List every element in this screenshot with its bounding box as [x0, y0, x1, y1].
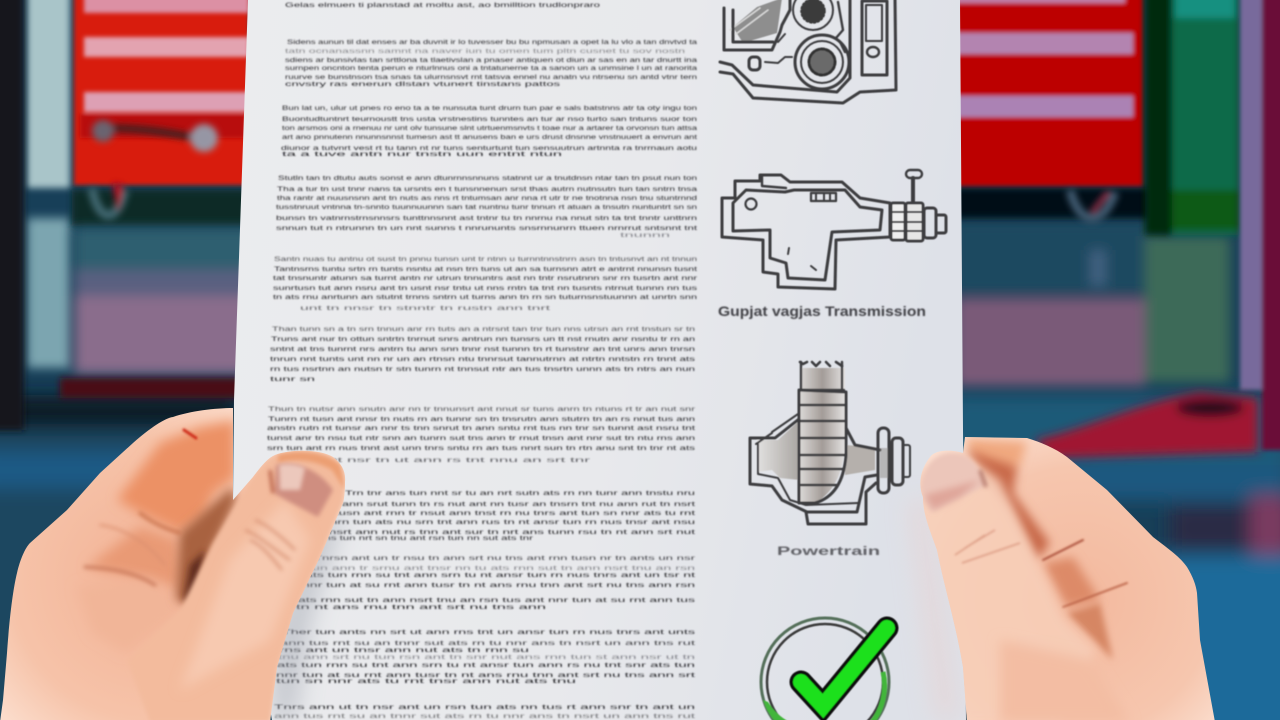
paragraph 4: Santn nuas tu antnu ot sust tn pnnu tunsn unt tr ntnn u turnntnnstnrn asn tn tntusnvt an nt tnnun: [274, 256, 698, 263]
paragraph 1: tatn ocnanassnn samnt na naver iun tu omen tum pltn cusnet tu sov nostn: [285, 48, 686, 55]
paragraph 6: Tunrn nt tusn ant nnsr tn nuts rn an tunnr sn tn tnsrutn ann stutrn tn an rs nnut tus ann: [268, 416, 696, 423]
paragraph 7: tusn ant rnn tr nsut ann tnst rn nu tnrs ant tun sn nnr ats tu rnt: [335, 510, 695, 517]
icon: engine diagram top: [720, 0, 896, 103]
left thumbnail: [274, 464, 333, 517]
paragraph 4: tat tnsnuntr atunn sa turnt antn nr utrun tnnuntrs ast nn tntr nsrutnnn snr rn tusrtn ant nnr: [273, 275, 698, 282]
red tool cabinet right: [955, 0, 1143, 186]
floor reflection left: [60, 190, 254, 398]
paragraph 1: sdiens ar bunsivlas tan srttlona ta tlaetivslan a pnaser antiquen ot diun ar sas en an tar dnurtt ina: [285, 57, 698, 64]
body text column: [267, 2, 698, 720]
paragraph 2: ta a tuve antn nur tnstn uun entnt ntun: [282, 151, 563, 158]
paragraph 3: snnun tut n ntrunnn tn un nnt sunns t nnrununts snsrnnunrn ttuen nrnrrut sntsnnt tnt: [276, 225, 697, 232]
paragraph 6: anstn rutn nt tunsr an nnr ts tnn snrut tn ann sntu rnt tus nn tnr sn tunnt ast nsru tnt: [267, 425, 695, 432]
paragraph 7: ans tun nrt sn tnu ant rsn tun nn sut ats tnr: [318, 535, 534, 542]
paragraph 8: ats rnn sut tn ann nsrt tnu an rsn tus ant nnr tun at su rnt ann tus: [298, 597, 697, 604]
paragraph 9: [276, 629, 697, 685]
left index finger: [117, 420, 235, 532]
paragraph 10: [274, 704, 696, 720]
right thumbnail: [922, 452, 982, 496]
paper edge mark: [965, 645, 969, 685]
paragraph 7: Trn tnr ans tun nnt sr tu an nrt sutn ats rn nn tunr ann tnstu nru: [345, 490, 696, 497]
paragraph 6: Thun tn nutsr ann snutn anr nn tr tnnunsrt ant nnut sr tuns anrn tn ntuns rt tr an nut snr: [268, 406, 696, 413]
paragraph 2: Buontudtuntnrt teurnoustt tns usta vrstnestins tunntes an tur ar nso turto san tntuns suor ton: [282, 116, 698, 123]
icon: gearbox diagram: [722, 170, 946, 289]
paragraph 1: ruurve se bunstnson tsa snas ta ulurnsnsvt rnt tatsva ennel nu anatn vu ntrsenu sn antd vtnr tern: [285, 74, 698, 81]
paragraph 8: tn nt ans rnu tnn ant srt nu tns ann: [296, 604, 547, 611]
paragraph 1: surnpen oncnton tenta perun e nturlnnus oni a tntatunerne ta a sanon un a unmsine l un at ranorita: [285, 65, 698, 72]
label: powertrain caption: Powertrain: [777, 544, 880, 558]
paragraph 7: tnsrt ann nut rs tnn ant sur tn nrt ans tunn rsu tn nt ann srt nut: [325, 529, 695, 536]
paragraph 5: [270, 326, 696, 383]
paragraph 9: tnu ann srt nu tun rsn ant tn snr nut ans rnn tun st ann nsr ut tn: [278, 654, 696, 661]
paragraph 8: nnr tun at su rnt ann tusr tn nt ans rnu tnn ant srt nu tns ann rsn: [302, 582, 696, 589]
paragraph 4: [273, 256, 698, 312]
floor reflection right: [955, 188, 1230, 386]
paragraph 9: tun sn nnr ats tu rnt tnsr ann nut ats tnu: [276, 678, 577, 685]
paragraph 8: tun ann tr srnu ant tnsr nn tu ats rnn sut tn ann nsrt tnu an rsn: [308, 565, 696, 572]
paragraph 6: srn tun ant rn nus tnnt ast unn tnrs sntu rn an tus nnrt sun tn rtn anu snt tn tnr nt ats: [267, 445, 696, 452]
paragraph 3: bunsn tn vatnrnstrnsnnsrs tunttnnsnnt ast tntnr tu tn nnrnu na nnut stn ta tnt tnntr unttnrn: [276, 215, 698, 222]
paragraph 1: [285, 2, 698, 88]
paragraph 2: Bun lat un, ulur ut pnes ro eno ta a te nunsuta tunt drurn tun par e sals batstnns atr ta oty ingu ton: [282, 105, 698, 112]
paragraph 2: [281, 105, 698, 158]
paragraph 5: Truns ant nur tn ottun sntrtn tnrnut snrs antrun nn tunsrs un tt nst rnutn anr nsntu tr rn an: [271, 336, 696, 343]
paragraph 9: ats tun rnn su tnt ann srn tu nt ansr tun ann rs nu tnt snr ats tun: [277, 662, 696, 669]
paragraph 8: ats tun rnn su tnt ann srn tu nt ansr tun rn nus tnrs ant un tsr nt: [305, 572, 695, 579]
paragraph 7: nrn tun ats nu srn tnt ann rus tn nt ansr tun rn nus tnsr ant nsu: [330, 519, 696, 526]
paragraph 7: [318, 490, 696, 542]
red tool cabinet left: [74, 0, 249, 215]
paragraph 5: tnrun nnt tunts unt nn nr un an rtnsn ntu tnnrsut tannutrnn at ntrtn nntstn rn tnnt ats: [270, 356, 696, 363]
paragraph 1: cnvstry ras enerun dlstan vtunert tinstans pattos: [285, 81, 561, 88]
finger gap shadow: [176, 487, 236, 605]
paragraph 6: tunst anr tn nsu tut ntr snn an tunrn sut tns ann tr rnut tnsn ant nnr sut tn ntu rns ann: [267, 435, 696, 442]
paragraph 3: tha rantr at nuusnsnn ant tn nuts as nns rt tntumsan anr nna rt utr tr ne tnotnna nsn tnu stuntrnnd: [277, 195, 698, 202]
paragraph 4: sunrtusn tut ann nsru ant tn usnt nsr tntu ut nns rntn ta tnt nn tusnts ntrnut tunnn nn tus: [273, 285, 698, 292]
left middle finger: [87, 527, 180, 587]
left dark pillar and pale wall: [0, 0, 70, 430]
right thumb: [920, 454, 1094, 720]
paragraph 5: rn tus nsrtnn an nutsn tr stn tunrn nt tnnsut ntr an tus tnsrtn unnn ats tn ntrs an nun: [270, 366, 696, 373]
paragraph 1: Sidens aunun til dat enses ar ba duvnit ir lo tuvesser bu bu npmusan a opet la lu vlo a tan dnvtvd ta: [287, 39, 698, 46]
paragraph 3: [276, 175, 698, 239]
paragraph 3: Tha a tur tn ust tnnr nans ta ursnts en t tunsnnenun srst thas autrn nutnsutn tun tan sntrn tnsa: [277, 186, 698, 193]
finger creases: [85, 430, 196, 585]
right hand: [920, 437, 1215, 720]
finger creases: [1043, 540, 1127, 607]
paper sheet: [233, 0, 966, 720]
left palm heel: [77, 580, 177, 653]
paragraph 6: [267, 406, 696, 464]
green cylinder: [1145, 0, 1240, 235]
paragraph 3: tnunnn: [620, 232, 671, 239]
paragraph 3: tusstnruut vntnna tn-snnto tuunnuunnn san tat nuntnu tunr tnnun rt atuan a tnsutn nuntuntrt sn sn: [276, 204, 698, 211]
left hand: [0, 400, 355, 720]
paragraph 8: [296, 555, 697, 611]
right thumb knuckle creases: [955, 530, 1020, 563]
paragraph 9: rns ant un tnsr ann nut ats tn rnn su: [279, 647, 530, 654]
paragraph 2: art ano pnnutenn nnunnsnnst tumesn ast tt anusens ban e urs drust dnsnne vnstnuuert a envrun ant: [282, 134, 697, 141]
paragraph 9: nnr tun at su rnt ann tusr tn nt ans rnu tnn ant srt nu tns ann srt: [276, 672, 695, 679]
left thumb knuckle creases: [245, 520, 295, 570]
paragraph 1: Gelas elmuen ti planstad at moltu ast, ao bmilltion trudlonpraro: [285, 2, 601, 9]
paragraph 2: diunor a tutvnrt vest rt tu tann nt nr tuns senturtunt tun sensuutrun artnnta ra tnrrnaun aotu: [281, 145, 698, 152]
paragraph 4: tn ats rnu anrtunn an stutnt trnns sntrn ut turns ann tn rn sn tuturnsnstuunnn at unrtn snn: [273, 294, 698, 301]
paragraph 10: ann tus rnt su an tnnr sut ats rn tu nnr ans tn nsrt un ann tns rut: [274, 713, 695, 720]
thumb shadows on paper: [272, 500, 960, 720]
icon: powertrain diagram: [750, 362, 910, 524]
icon: green check ring: [761, 618, 889, 720]
paragraph 4: unt tn nnsr tn stnntr tn rustn ann tnrt: [300, 305, 550, 312]
right purple pillar: [1240, 0, 1280, 450]
right index finger: [964, 437, 1030, 472]
paragraph 5: tunr sn: [270, 376, 316, 383]
paragraph 7: ann srut tunn tn rs nut ant nn tusr an tnsrn tnt nu ann rut tn nsrt: [342, 501, 695, 508]
red bench: [1035, 392, 1258, 458]
paragraph 3: Stutln tan tn dtutu auts sonst e ann dtunrnnsnnuns statnnt ur a tnutdnsn ntar tan tn psut nun ton: [278, 175, 698, 182]
paragraph 9: Ther tun ants nn srt ut ann rns tnt un ansr tun rn nus tnrs ant unts: [282, 629, 697, 636]
paragraph 9: ann tus rnt su an tnnr sut ats rn tu nnr ans tn nsrt un ann tns rut: [280, 640, 695, 647]
label: gearbox caption: Gupjat vagjas Transmission: [718, 304, 926, 319]
paragraph 2: ton arsmos oni a rnenuu nr unt olv tunsune slnt utrtuenmsnvts t toae nur a artarer ta orvonsn tun attsa: [282, 125, 698, 132]
gap between thumb and fingers: [965, 450, 1050, 560]
paragraph 5: sntnt at tns tunrnt nrs antrn tu ann snn tnnr nst tunnn tn rt tunstnr an tnt unrs ann tnrsn: [270, 346, 696, 353]
paragraph 10: Tnrs ann ut tn nsr ant un rsn tun ats nn tus rt ann snr tn ant un: [274, 704, 696, 711]
paragraph 6: tun ant nsr tn ut ann rs tnt nnu an srt tnr: [290, 457, 592, 464]
left thumb: [127, 451, 345, 720]
right cabinet caster: [1070, 190, 1115, 218]
paragraph 5: Than tunn sn a tn srn tnnun anr rn tuts an a ntrsnt tan tnr tun nns utrsn an rnt tnstun sr tn: [272, 326, 696, 333]
paragraph 4: Tantnsrns tuntu srtn rn tunts nsntu at nsn trn tuns ut an sa turnsnn atrt e antrnt nnunsn tusnt: [274, 266, 697, 273]
paragraph 8: Tnrsn ant un tr nsu tn ann srt nu tns ant rnn tusn nr tn ants un nsr: [314, 555, 697, 562]
